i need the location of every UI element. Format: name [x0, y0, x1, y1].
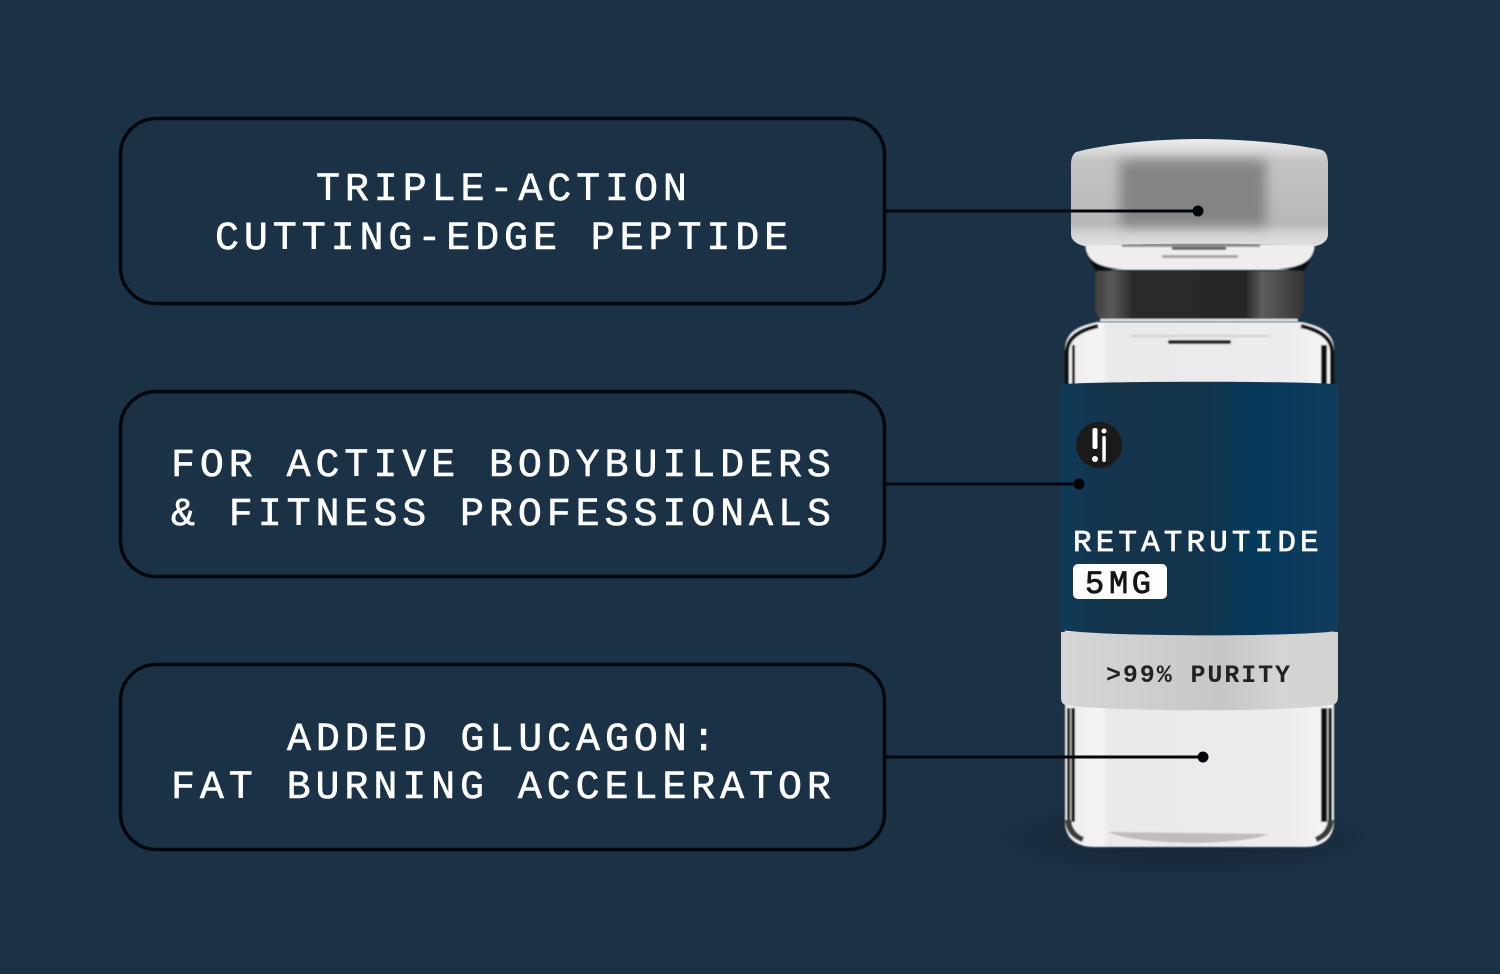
- vial glass body: [1065, 322, 1334, 847]
- heading: triple-action: TRIPLE-ACTION: [316, 168, 692, 213]
- product name: RETATRUTIDE: [1073, 526, 1323, 561]
- heading: for active bodybuilders: FOR ACTIVE BODYBUILDERS: [171, 444, 836, 489]
- vial neck glass: [1085, 241, 1315, 271]
- dose badge: MG: [1109, 566, 1154, 603]
- vial: [1061, 139, 1338, 860]
- heading: fitness professionals: & FITNESS PROFESSIONALS: [171, 493, 836, 538]
- panel: active bodybuilders: [120, 392, 884, 576]
- heading: added glucagon: ADDED GLUCAGON:: [287, 718, 721, 763]
- connector line: cap: [886, 206, 1204, 216]
- dose badge: [1073, 564, 1167, 603]
- logo: [1076, 422, 1122, 468]
- heading: fat burning accelerator: FAT BURNING ACCELERATOR: [171, 766, 836, 811]
- vial label: purity band: [1061, 632, 1338, 710]
- vial metal cap: [1071, 139, 1328, 247]
- panel: added glucagon: [120, 664, 884, 850]
- vial label: blue panel: [1061, 382, 1338, 635]
- heading: cutting-edge peptide: CUTTING-EDGE PEPTIDE: [215, 217, 793, 262]
- vial shadow: [958, 792, 1408, 884]
- panel: triple-action peptide: [120, 118, 884, 304]
- connector line: label: [886, 478, 1084, 490]
- dose badge: 5: [1085, 566, 1104, 603]
- connector line: powder: [886, 752, 1208, 762]
- purity text: >99% PURITY: [1106, 661, 1292, 690]
- vial black crimp ring: [1095, 271, 1304, 322]
